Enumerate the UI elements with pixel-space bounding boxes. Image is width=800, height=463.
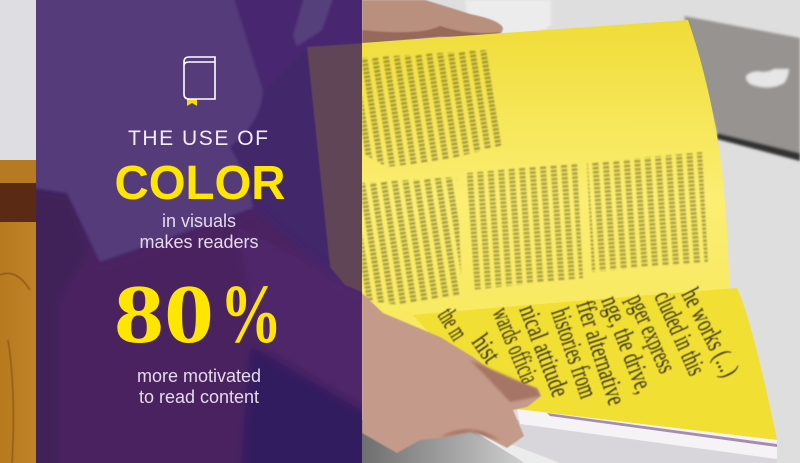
magazine: lower yellow page with large text: ffer alternative bbox=[570, 297, 632, 409]
magazine: lower yellow page with large text: nical attitude bbox=[513, 300, 576, 401]
magazine: lower yellow page with large text: pger express bbox=[622, 289, 683, 377]
magazine: upper yellow page bbox=[362, 20, 729, 345]
statistic: 80 percent bbox=[117, 286, 276, 343]
magazine: lower yellow page with large text: the m bbox=[432, 302, 474, 345]
photo: person's shirt and trousers at left bbox=[0, 0, 36, 463]
photo: white cup bbox=[465, 0, 551, 36]
text: in visuals makes readers: makes readers bbox=[139, 232, 259, 252]
statistic: 80 percent: % bbox=[220, 268, 282, 361]
icon: book with bookmark bbox=[184, 57, 215, 106]
heading: color: COLOR bbox=[114, 157, 286, 210]
magazine: lower yellow page with large text: histories from bbox=[545, 304, 604, 402]
magazine: lower yellow page with large text: he works (...) bbox=[676, 283, 746, 381]
magazine: page edges bbox=[467, 409, 777, 463]
magazine: lower yellow page with large text: hist bbox=[466, 328, 507, 369]
magazine: lower yellow page with large text: wards officia bbox=[486, 303, 545, 388]
magazine: small text columns bbox=[362, 50, 708, 305]
panel: arm and trousers tones bbox=[36, 189, 362, 463]
text: more motivated to read content: to read content bbox=[139, 387, 259, 407]
purple overlay panel bbox=[20, 0, 380, 463]
magazine: lower yellow page with large text: nge, the drive, bbox=[595, 291, 660, 397]
hand shading bbox=[440, 360, 540, 440]
photo: lower hand on the page bbox=[362, 293, 541, 453]
text: more motivated to read content bbox=[138, 368, 260, 403]
photo: top hand holding the book bbox=[362, 0, 503, 44]
text: in visuals makes readers: in visuals bbox=[162, 211, 236, 231]
heading: the use of: THE USE OF bbox=[128, 127, 268, 150]
panel: page seen through the overlay bbox=[306, 43, 362, 292]
text: more motivated to read content: more motivated bbox=[137, 366, 261, 386]
magazine: lower yellow page with large text: cluded in this bbox=[649, 286, 712, 380]
panel: upper sleeve and watch strap bbox=[292, 0, 334, 47]
photo: laptop bbox=[684, 16, 800, 161]
statistic: 80 percent: 80 bbox=[114, 268, 214, 361]
magazine: lower yellow page with large text bbox=[413, 283, 777, 440]
panel: shirt bbox=[20, 0, 263, 262]
text: in visuals makes readers bbox=[140, 214, 258, 248]
